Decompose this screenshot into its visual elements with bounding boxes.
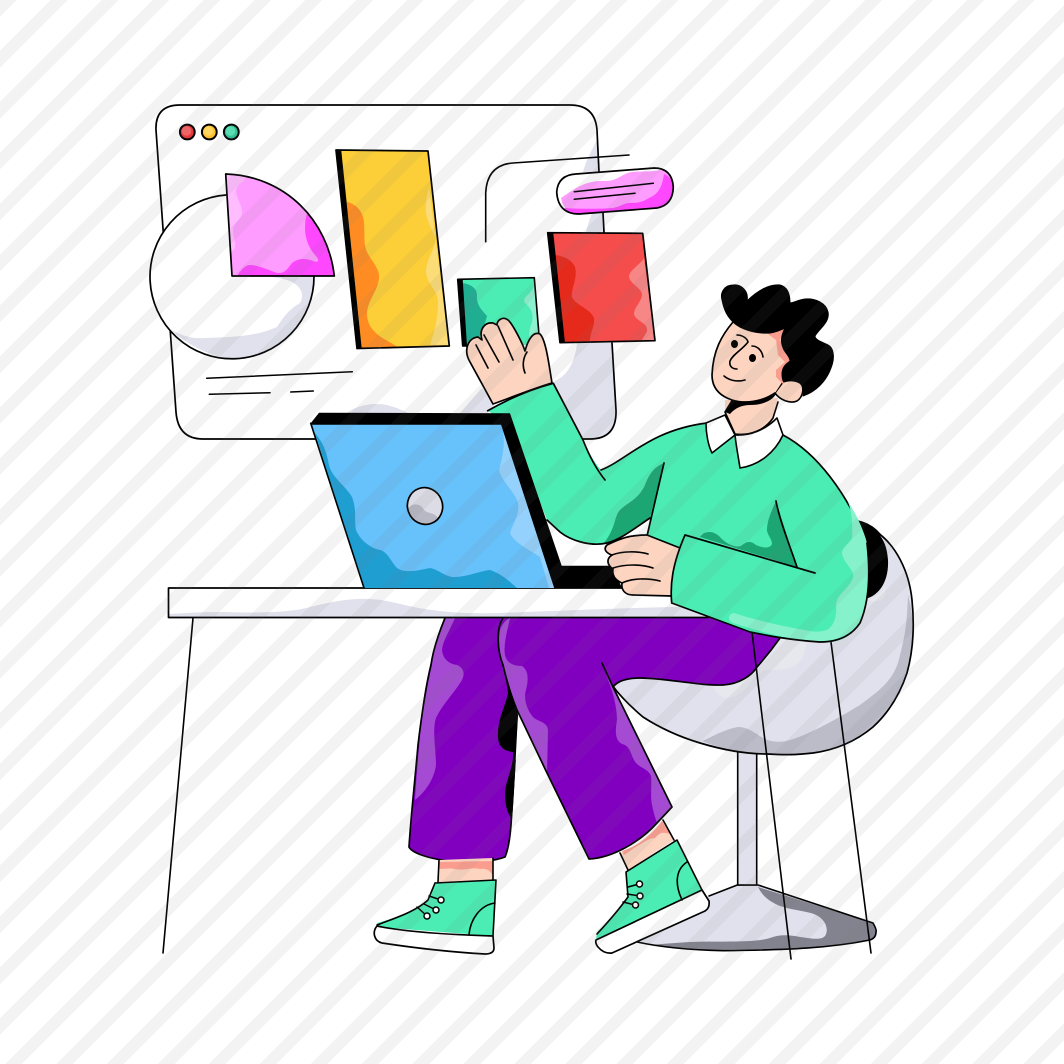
callout pill	[557, 168, 673, 214]
laptop	[311, 413, 622, 588]
chair back cushion	[858, 521, 889, 600]
window control dots	[180, 125, 239, 139]
arm shadow	[604, 463, 664, 543]
chair seat shell	[612, 533, 913, 755]
bar chart: yellow bar	[336, 150, 449, 348]
person: front leg trousers	[498, 617, 780, 859]
shoe: left	[374, 880, 496, 954]
person: forearm sleeve	[671, 500, 869, 642]
bar chart: red bar	[548, 233, 655, 343]
panel: browser window	[156, 105, 616, 439]
bar chart: green bar	[458, 278, 540, 346]
chair stem	[738, 750, 757, 885]
person: shirt collar	[706, 415, 783, 468]
chair base	[637, 885, 876, 951]
person: raised hand	[467, 318, 552, 404]
secondary panel outline	[486, 155, 629, 242]
face	[712, 322, 790, 402]
ear	[775, 381, 803, 402]
sleeve highlight	[729, 500, 869, 642]
person: right ankle	[620, 820, 674, 870]
facial features	[724, 335, 763, 381]
desk top	[168, 588, 708, 618]
person: neck	[725, 394, 778, 434]
hair	[721, 285, 833, 396]
torso shadow	[700, 501, 797, 567]
person: left ankle	[438, 858, 493, 882]
desk legs and chair legs	[163, 618, 871, 959]
person: head	[712, 285, 833, 402]
person: hand on keyboard	[605, 535, 680, 597]
person: torso and raised arm	[488, 383, 868, 590]
shoe: right	[596, 840, 709, 953]
laptop logo	[402, 483, 448, 529]
person: back leg	[409, 618, 518, 862]
pie chart	[150, 174, 334, 359]
text lines under pie chart	[207, 372, 352, 394]
chair	[612, 521, 913, 951]
